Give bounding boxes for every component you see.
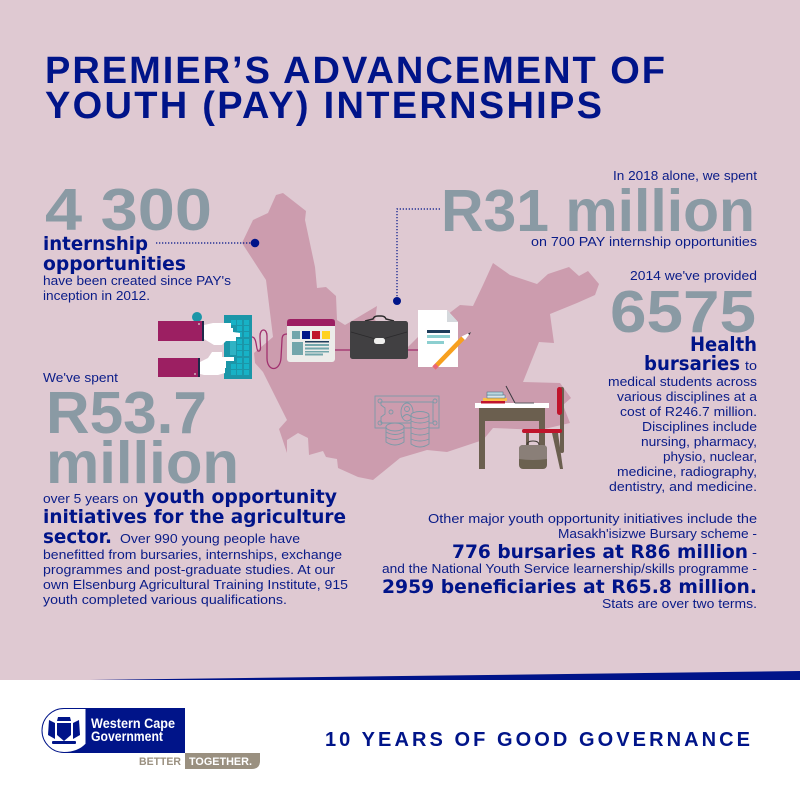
stat: 6575 health bursaries: cost of R246.7 million.: [620, 405, 757, 419]
stat: 6575 health bursaries: various disciplines at a: [617, 390, 757, 404]
text block: other initiatives: 2959 beneficiaries at R65.8 million.: [382, 576, 757, 598]
stat: 4 300 internship opportunities: inception in 2012.: [43, 289, 150, 303]
stat: 4 300 internship opportunities: 4 300: [45, 177, 212, 243]
icon: coat of arms: [48, 717, 80, 744]
stat: 6575 health bursaries: physio, nuclear,: [663, 450, 757, 464]
stat: R31 million: on 700 PAY internship opportunities: [531, 235, 757, 249]
icon: hands typing on keyboard: [158, 312, 252, 379]
text block: other initiatives: and the National Youth Service learnership/skills programme -: [382, 562, 757, 576]
stat: R31 million: In 2018 alone, we spent: [613, 169, 758, 183]
icon: briefcase: [350, 316, 408, 359]
text block: other initiatives: Masakh'isizwe Bursary scheme -: [558, 527, 757, 541]
stat: 6575 health bursaries: dentistry, and medicine.: [609, 480, 757, 494]
text block: other initiatives: [382, 512, 757, 611]
connector: internships to map: [156, 239, 259, 247]
stat: R53.7 million agriculture: initiatives for the agriculture: [43, 506, 346, 528]
stat: R31 million: R31 million: [441, 178, 755, 244]
text block: other initiatives: Other major youth opportunity initiatives include the: [428, 512, 757, 526]
logo: Western Cape Government: TOGETHER.: [189, 756, 252, 768]
stat: 4 300 internship opportunities: opportunities: [43, 253, 186, 275]
stat: 4 300 internship opportunities: have been created since PAY's: [43, 274, 231, 288]
stat: R53.7 million agriculture: Over 990 young people have: [120, 532, 300, 546]
logo: Western Cape Government: [42, 708, 260, 769]
text block: other initiatives: Stats are over two terms.: [602, 597, 757, 611]
icon: document and pencil: [418, 310, 471, 368]
logo: Western Cape Government: Western Cape: [91, 716, 175, 731]
stat: 6575 health bursaries: to: [745, 359, 757, 373]
stat: R53.7 million agriculture: [43, 371, 348, 607]
icon: desk, chair, books, laptop and bag: [475, 386, 564, 469]
stat: 6575 health bursaries: Health: [690, 333, 757, 356]
text block: other initiatives: 776 bursaries at R86 million: [452, 541, 748, 563]
logo: Western Cape Government: Government: [91, 729, 163, 744]
stat: 6575 health bursaries: bursaries: [644, 352, 740, 375]
stat: R53.7 million agriculture: R53.7: [46, 380, 207, 446]
stat: R53.7 million agriculture: programmes and post-graduate studies. At our: [43, 563, 335, 577]
stat: R53.7 million agriculture: youth opportunity: [144, 486, 338, 508]
stat: R53.7 million agriculture: youth completed various qualifications.: [43, 593, 287, 607]
text block: other initiatives: -: [752, 546, 757, 560]
icon: browser window: [287, 319, 335, 362]
stat: 6575 health bursaries: 2014 we've provided: [630, 269, 757, 283]
logo: Western Cape Government: BETTER: [139, 756, 181, 768]
stat: 6575 health bursaries: medicine, radiography,: [617, 465, 757, 479]
stat: 6575 health bursaries: medical students across: [608, 375, 757, 389]
title: PREMIER’S ADVANCEMENT OF: [45, 50, 665, 92]
stat: R53.7 million agriculture: We've spent: [43, 371, 119, 385]
stat: 6575 health bursaries: [608, 269, 757, 494]
stat: 6575 health bursaries: Disciplines include: [642, 420, 757, 434]
title: [45, 50, 665, 127]
stat: 6575 health bursaries: nursing, pharmacy,: [641, 435, 757, 449]
stat: R53.7 million agriculture: benefitted from bursaries, internships, exchange: [43, 548, 342, 562]
stat: R53.7 million agriculture: own Elsenburg Agricultural Training Institute, 915: [43, 578, 348, 592]
stat: 4 300 internship opportunities: [43, 177, 231, 303]
stat: R53.7 million agriculture: over 5 years on: [43, 492, 138, 506]
stat: 4 300 internship opportunities: internship: [43, 233, 148, 255]
stat: R53.7 million agriculture: million: [46, 430, 239, 496]
title: YOUTH (PAY) INTERNSHIPS: [45, 85, 602, 127]
footer: white band with navy stripe: [0, 671, 800, 800]
icon: cable and connecting line: [252, 330, 418, 368]
stat: R53.7 million agriculture: sector.: [43, 526, 112, 548]
stat: 6575 health bursaries: 6575: [610, 279, 756, 345]
connector: R31 million to briefcase: [393, 209, 440, 305]
icon: banknote and coins: [375, 396, 439, 447]
footer tagline: 10 YEARS OF GOOD GOVERNANCE: [325, 729, 750, 751]
map of the Western Cape: [242, 193, 599, 480]
